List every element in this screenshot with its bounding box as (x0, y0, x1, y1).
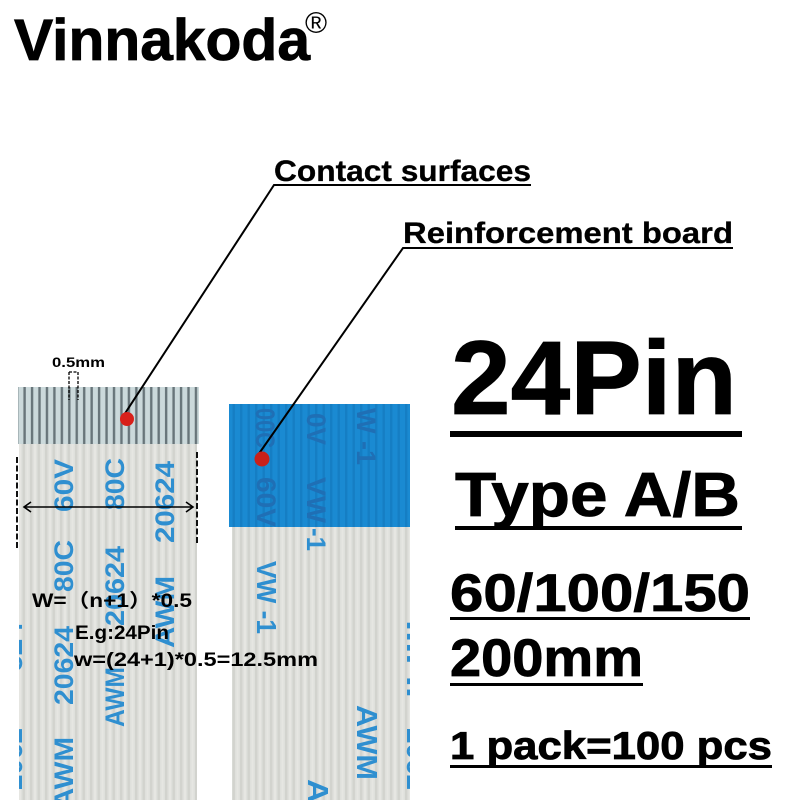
width formula text: W=（n+1）*0.5 (32, 590, 193, 612)
width formula text: w=(24+1)*0.5=12.5mm (73, 650, 318, 671)
left cable contact surfaces (18, 387, 199, 444)
pitch dimension 0.5mm (52, 354, 105, 400)
left cable printed markings: 80C (100, 458, 130, 510)
right cable printed markings: VW (301, 477, 331, 524)
contact surfaces leader line (122, 185, 531, 418)
right cable printed markings: 60V (251, 477, 281, 527)
heading: Type A/B: Type A/B (455, 461, 740, 530)
left cable printed markings: 20624 (100, 546, 130, 626)
left cable printed markings: 80C (49, 540, 79, 592)
right cable printed markings: 2062 (401, 728, 432, 790)
left cable printed markings: 20624 (49, 626, 79, 705)
right cable printed markings: VW -1 (251, 561, 282, 634)
right cable printed markings: AWM (350, 705, 382, 780)
left cable printed markings: 20624 (150, 461, 180, 543)
left cable printed markings: AWM (150, 576, 180, 648)
lengths: 60/100/150 200mm: 60/100/150 (450, 564, 750, 623)
contact surfaces red dot (120, 412, 134, 426)
brand logo: Vinnakoda (14, 8, 311, 73)
right cable printed markings: W -1 (351, 408, 381, 465)
right cable ribbon body (232, 526, 410, 800)
right cable printed markings: -1 (301, 528, 331, 551)
left cable: type A (0, 387, 199, 800)
left cable printed markings (19, 458, 174, 800)
callout: reinforcement board (254, 217, 733, 466)
right cable printed markings (256, 408, 410, 800)
reinforcement board leader line (258, 248, 733, 455)
right cable printed markings: A (301, 779, 333, 800)
pitch dimension 0.5mm: 0.5mm (52, 354, 105, 370)
heading: 24Pin: 24Pin (451, 320, 737, 437)
width dimension arrow (17, 452, 197, 548)
width formula text (32, 590, 318, 671)
left cable printed markings: 60V (49, 459, 79, 512)
right cable printed markings: .... .. (401, 620, 432, 698)
width formula text: E.g:24Pin (75, 623, 169, 644)
left cable ribbon body (19, 444, 197, 800)
contact surfaces label: Contact surfaces (274, 155, 531, 188)
lengths: 60/100/150 200mm: 200mm (450, 629, 643, 688)
reinforcement board label: Reinforcement board (403, 217, 733, 250)
lengths: 60/100/150 200mm (450, 564, 750, 688)
left cable printed markings: AWM (100, 667, 130, 727)
right cable: type B (229, 404, 410, 800)
right cable printed markings: 0V (301, 413, 331, 445)
reinforcement board red dot (254, 452, 270, 466)
right cable printed markings: 00C (250, 408, 280, 448)
pack quantity: 1 pack=100 pcs (450, 725, 772, 768)
right cable blue reinforcement board (229, 404, 410, 527)
brand logo: ® (305, 7, 327, 40)
callout: contact surfaces (120, 155, 531, 426)
